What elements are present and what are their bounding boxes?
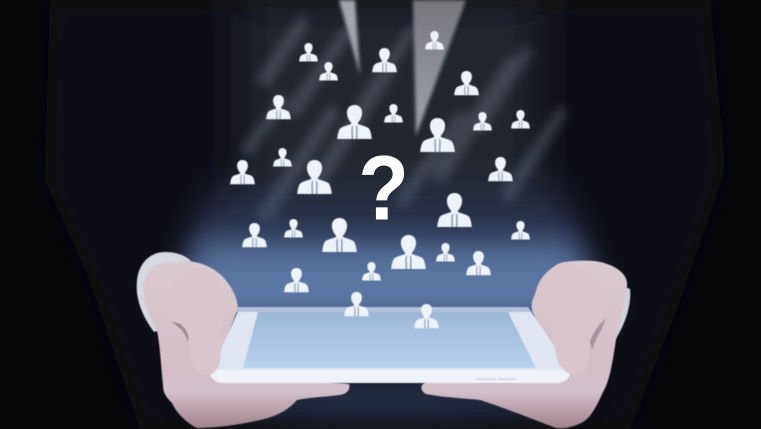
tablet screen xyxy=(243,312,536,368)
left thumb over tablet xyxy=(168,268,224,375)
left hand under tablet xyxy=(143,261,349,428)
icon group: people xyxy=(230,31,530,328)
left thumb crease shadow xyxy=(171,322,189,342)
blue glow above tablet xyxy=(165,165,610,422)
right shirt cuff xyxy=(609,286,630,341)
small person icons xyxy=(273,31,530,280)
medium person icons xyxy=(230,48,513,328)
large person icons xyxy=(297,105,472,269)
tablet xyxy=(210,307,570,383)
right hand under tablet xyxy=(421,261,627,428)
light rays xyxy=(240,15,568,224)
left shirt cuff xyxy=(137,252,191,332)
right thumb crease shadow xyxy=(590,318,606,350)
right thumb over tablet xyxy=(535,264,604,375)
question mark: ? xyxy=(358,136,409,239)
shirt collar and lapels xyxy=(339,0,466,136)
